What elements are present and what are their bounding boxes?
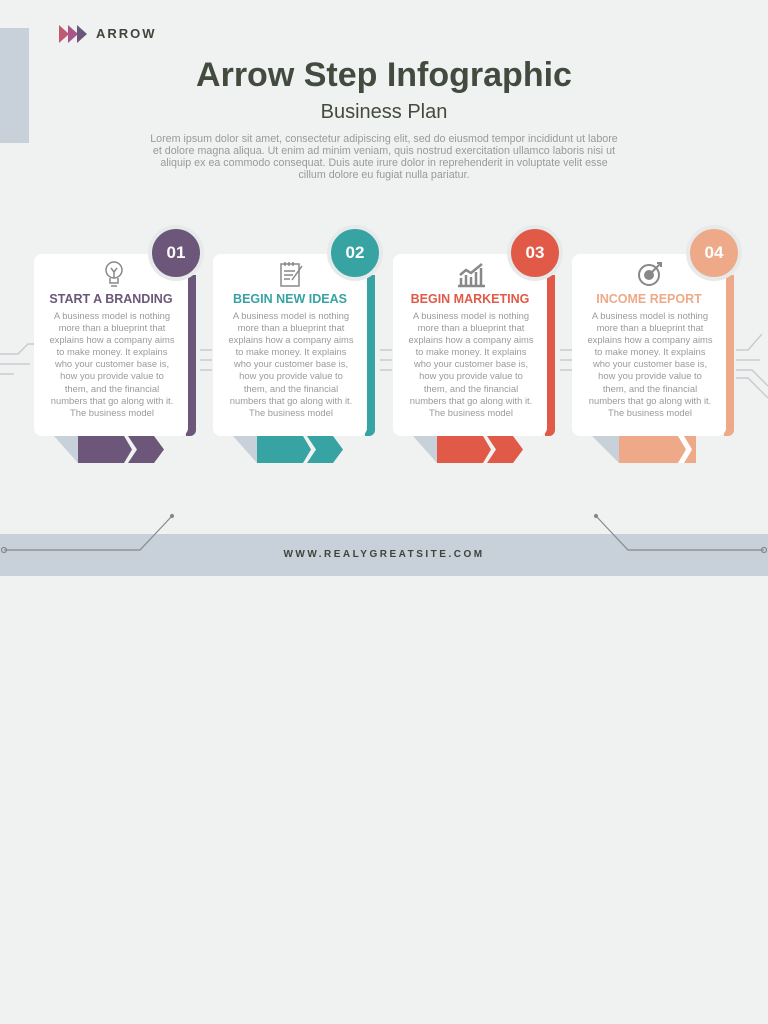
card 1: START A BRANDING bbox=[49, 292, 173, 306]
badge 03 bbox=[507, 225, 563, 281]
arrow: step 1 bbox=[54, 436, 164, 463]
step 2 bbox=[213, 225, 383, 463]
card 3: them, and the financial bbox=[424, 383, 518, 394]
card 2: BEGIN NEW IDEAS bbox=[233, 292, 347, 306]
card 2: explains how a company aims bbox=[228, 334, 354, 345]
icon: target bbox=[638, 262, 662, 286]
left decorative bar bbox=[0, 28, 29, 143]
card 1: The business model bbox=[70, 407, 154, 418]
card 2: to make money. It explains bbox=[236, 346, 346, 357]
badge 01 bbox=[148, 225, 204, 281]
step 1 bbox=[34, 225, 204, 463]
card 3: BEGIN MARKETING bbox=[411, 292, 529, 306]
card 4: to make money. It explains bbox=[595, 346, 705, 357]
footer url: WWW.REALYGREATSITE.COM bbox=[283, 549, 485, 560]
intro text: cillum dolore eu fugiat nulla pariatur. bbox=[298, 169, 470, 181]
card 3: who your customer base is, bbox=[414, 358, 528, 369]
badge 02: 02 bbox=[346, 243, 364, 262]
card 4: how you provide value to bbox=[598, 370, 702, 381]
card 3: how you provide value to bbox=[419, 370, 523, 381]
logo bbox=[59, 25, 157, 43]
badge 02 bbox=[327, 225, 383, 281]
intro text: aliquip ex ea commodo consequat. Duis aute irure dolor in reprehenderit in voluptate velit esse bbox=[160, 157, 608, 169]
card 1: to make money. It explains bbox=[57, 346, 167, 357]
subtitle: Business Plan bbox=[321, 101, 447, 123]
card 1: them, and the financial bbox=[65, 383, 159, 394]
arrow: step 3 bbox=[413, 436, 523, 463]
card 4: who your customer base is, bbox=[593, 358, 707, 369]
logo: ARROW bbox=[96, 26, 157, 41]
card 2: The business model bbox=[249, 407, 333, 418]
card 2 bbox=[213, 254, 367, 436]
step 3 bbox=[393, 225, 563, 463]
card 4 bbox=[572, 254, 726, 436]
step 4 bbox=[572, 225, 742, 463]
card 2: A business model is nothing bbox=[233, 310, 349, 321]
card 4: explains how a company aims bbox=[587, 334, 713, 345]
icon: chart bbox=[458, 263, 485, 288]
card 4: more than a blueprint that bbox=[597, 322, 703, 333]
card 4: The business model bbox=[608, 407, 692, 418]
card 1: more than a blueprint that bbox=[59, 322, 165, 333]
card 2: numbers that go along with it. bbox=[230, 395, 352, 406]
card 1: how you provide value to bbox=[60, 370, 164, 381]
card 3: A business model is nothing bbox=[413, 310, 529, 321]
card 2: them, and the financial bbox=[244, 383, 338, 394]
badge 01: 01 bbox=[167, 243, 185, 262]
badge 04 bbox=[686, 225, 742, 281]
card 3: explains how a company aims bbox=[408, 334, 534, 345]
card 3: to make money. It explains bbox=[416, 346, 526, 357]
card 2: more than a blueprint that bbox=[238, 322, 344, 333]
arrow: step 4 bbox=[592, 436, 696, 463]
intro text: Lorem ipsum dolor sit amet, consectetur adipiscing elit, sed do eiusmod tempor incididunt ut labore bbox=[150, 133, 618, 145]
card 3: more than a blueprint that bbox=[418, 322, 524, 333]
icon: lightbulb bbox=[105, 261, 123, 287]
intro text: et dolore magna aliqua. Ut enim ad minim veniam, quis nostrud exercitation ullamco laboris nisi ut bbox=[153, 145, 615, 157]
card 4: them, and the financial bbox=[603, 383, 697, 394]
icon: notepad bbox=[280, 262, 302, 287]
card 1: numbers that go along with it. bbox=[51, 395, 173, 406]
card 1: who your customer base is, bbox=[55, 358, 169, 369]
circuit decorations bbox=[0, 334, 768, 398]
footer band bbox=[0, 534, 768, 576]
card 4: numbers that go along with it. bbox=[589, 395, 711, 406]
card 2: who your customer base is, bbox=[234, 358, 348, 369]
title: Arrow Step Infographic bbox=[196, 56, 572, 94]
badge 04: 04 bbox=[705, 243, 723, 262]
card 4: A business model is nothing bbox=[592, 310, 708, 321]
card 2: how you provide value to bbox=[239, 370, 343, 381]
arrow: step 2 bbox=[233, 436, 343, 463]
intro text bbox=[150, 133, 618, 181]
card 3: The business model bbox=[429, 407, 513, 418]
card 1: A business model is nothing bbox=[54, 310, 170, 321]
card 4: INCOME REPORT bbox=[596, 292, 702, 306]
card 3: numbers that go along with it. bbox=[410, 395, 532, 406]
card 1: explains how a company aims bbox=[49, 334, 175, 345]
badge 03: 03 bbox=[526, 243, 544, 262]
card 1 bbox=[34, 254, 188, 436]
card 3 bbox=[393, 254, 547, 436]
